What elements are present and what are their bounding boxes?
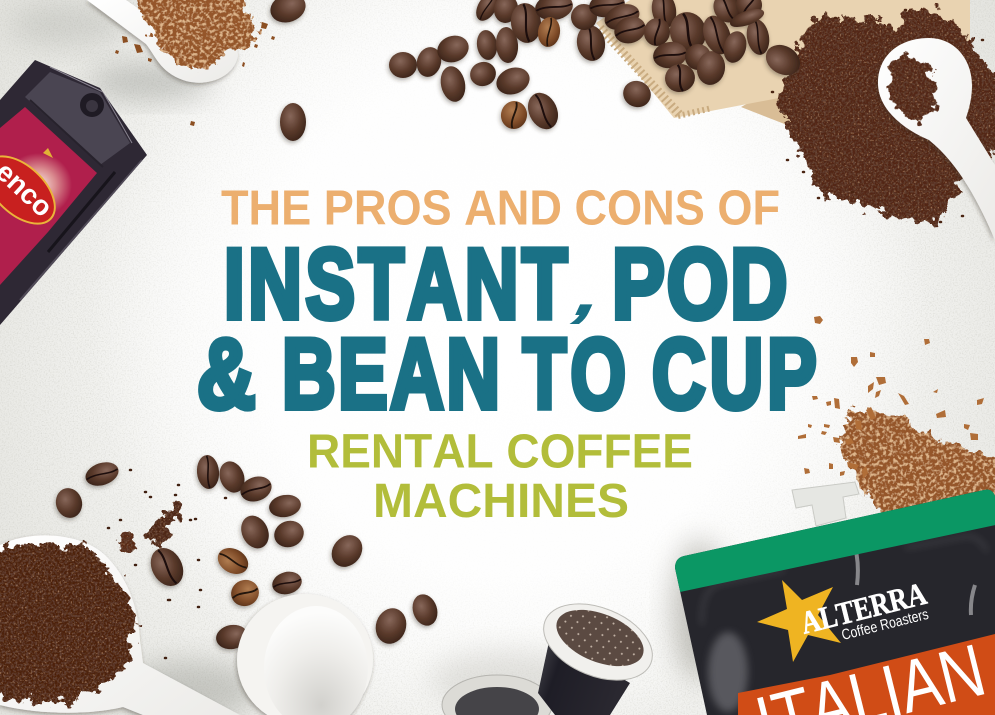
white measuring spoon with grounds, bottom left — [0, 535, 240, 715]
title: and bean to cup: & — [197, 319, 256, 430]
alterra coffee pouch, bottom right — [670, 480, 995, 715]
coffee grounds pile, top right — [772, 6, 995, 226]
capsule pods, bottom centre — [442, 589, 664, 715]
subtitle: rental coffee: RENTAL COFFEE — [307, 426, 693, 478]
white spoon with instant coffee granules, top left — [87, 0, 275, 126]
instant coffee granules, right — [798, 316, 995, 518]
coffee grounds crumbs, bottom left — [108, 470, 226, 670]
coffee beans, bottom left — [53, 454, 441, 652]
title: instant, pod: INSTANT — [224, 229, 571, 339]
pouch brand name: ALTERRA — [797, 575, 930, 641]
rental pod cartridge, top left — [0, 60, 147, 325]
title: and bean to cup: BEAN — [282, 319, 503, 429]
subtitle: machines: MACHINES — [373, 475, 629, 528]
title: instant, pod: , — [566, 262, 616, 327]
orange label band — [738, 634, 995, 715]
title: instant, pod — [224, 229, 789, 339]
pouch nozzle — [792, 482, 859, 526]
white cup, bottom centre — [237, 594, 373, 715]
pouch tagline: Coffee Roasters — [840, 606, 930, 644]
title: and bean to cup — [197, 319, 821, 430]
brand star — [757, 580, 841, 662]
title: instant, pod: POD — [612, 229, 789, 339]
white spoon with grounds, top right — [878, 38, 995, 240]
paper coffee filter — [596, 0, 970, 132]
coffee beans, top — [266, 0, 806, 141]
title: and bean to cup: CUP — [652, 319, 821, 429]
title: and bean to cup: TO — [523, 320, 630, 430]
title: the pros and cons of: THE PROS AND CONS OF — [221, 182, 780, 236]
